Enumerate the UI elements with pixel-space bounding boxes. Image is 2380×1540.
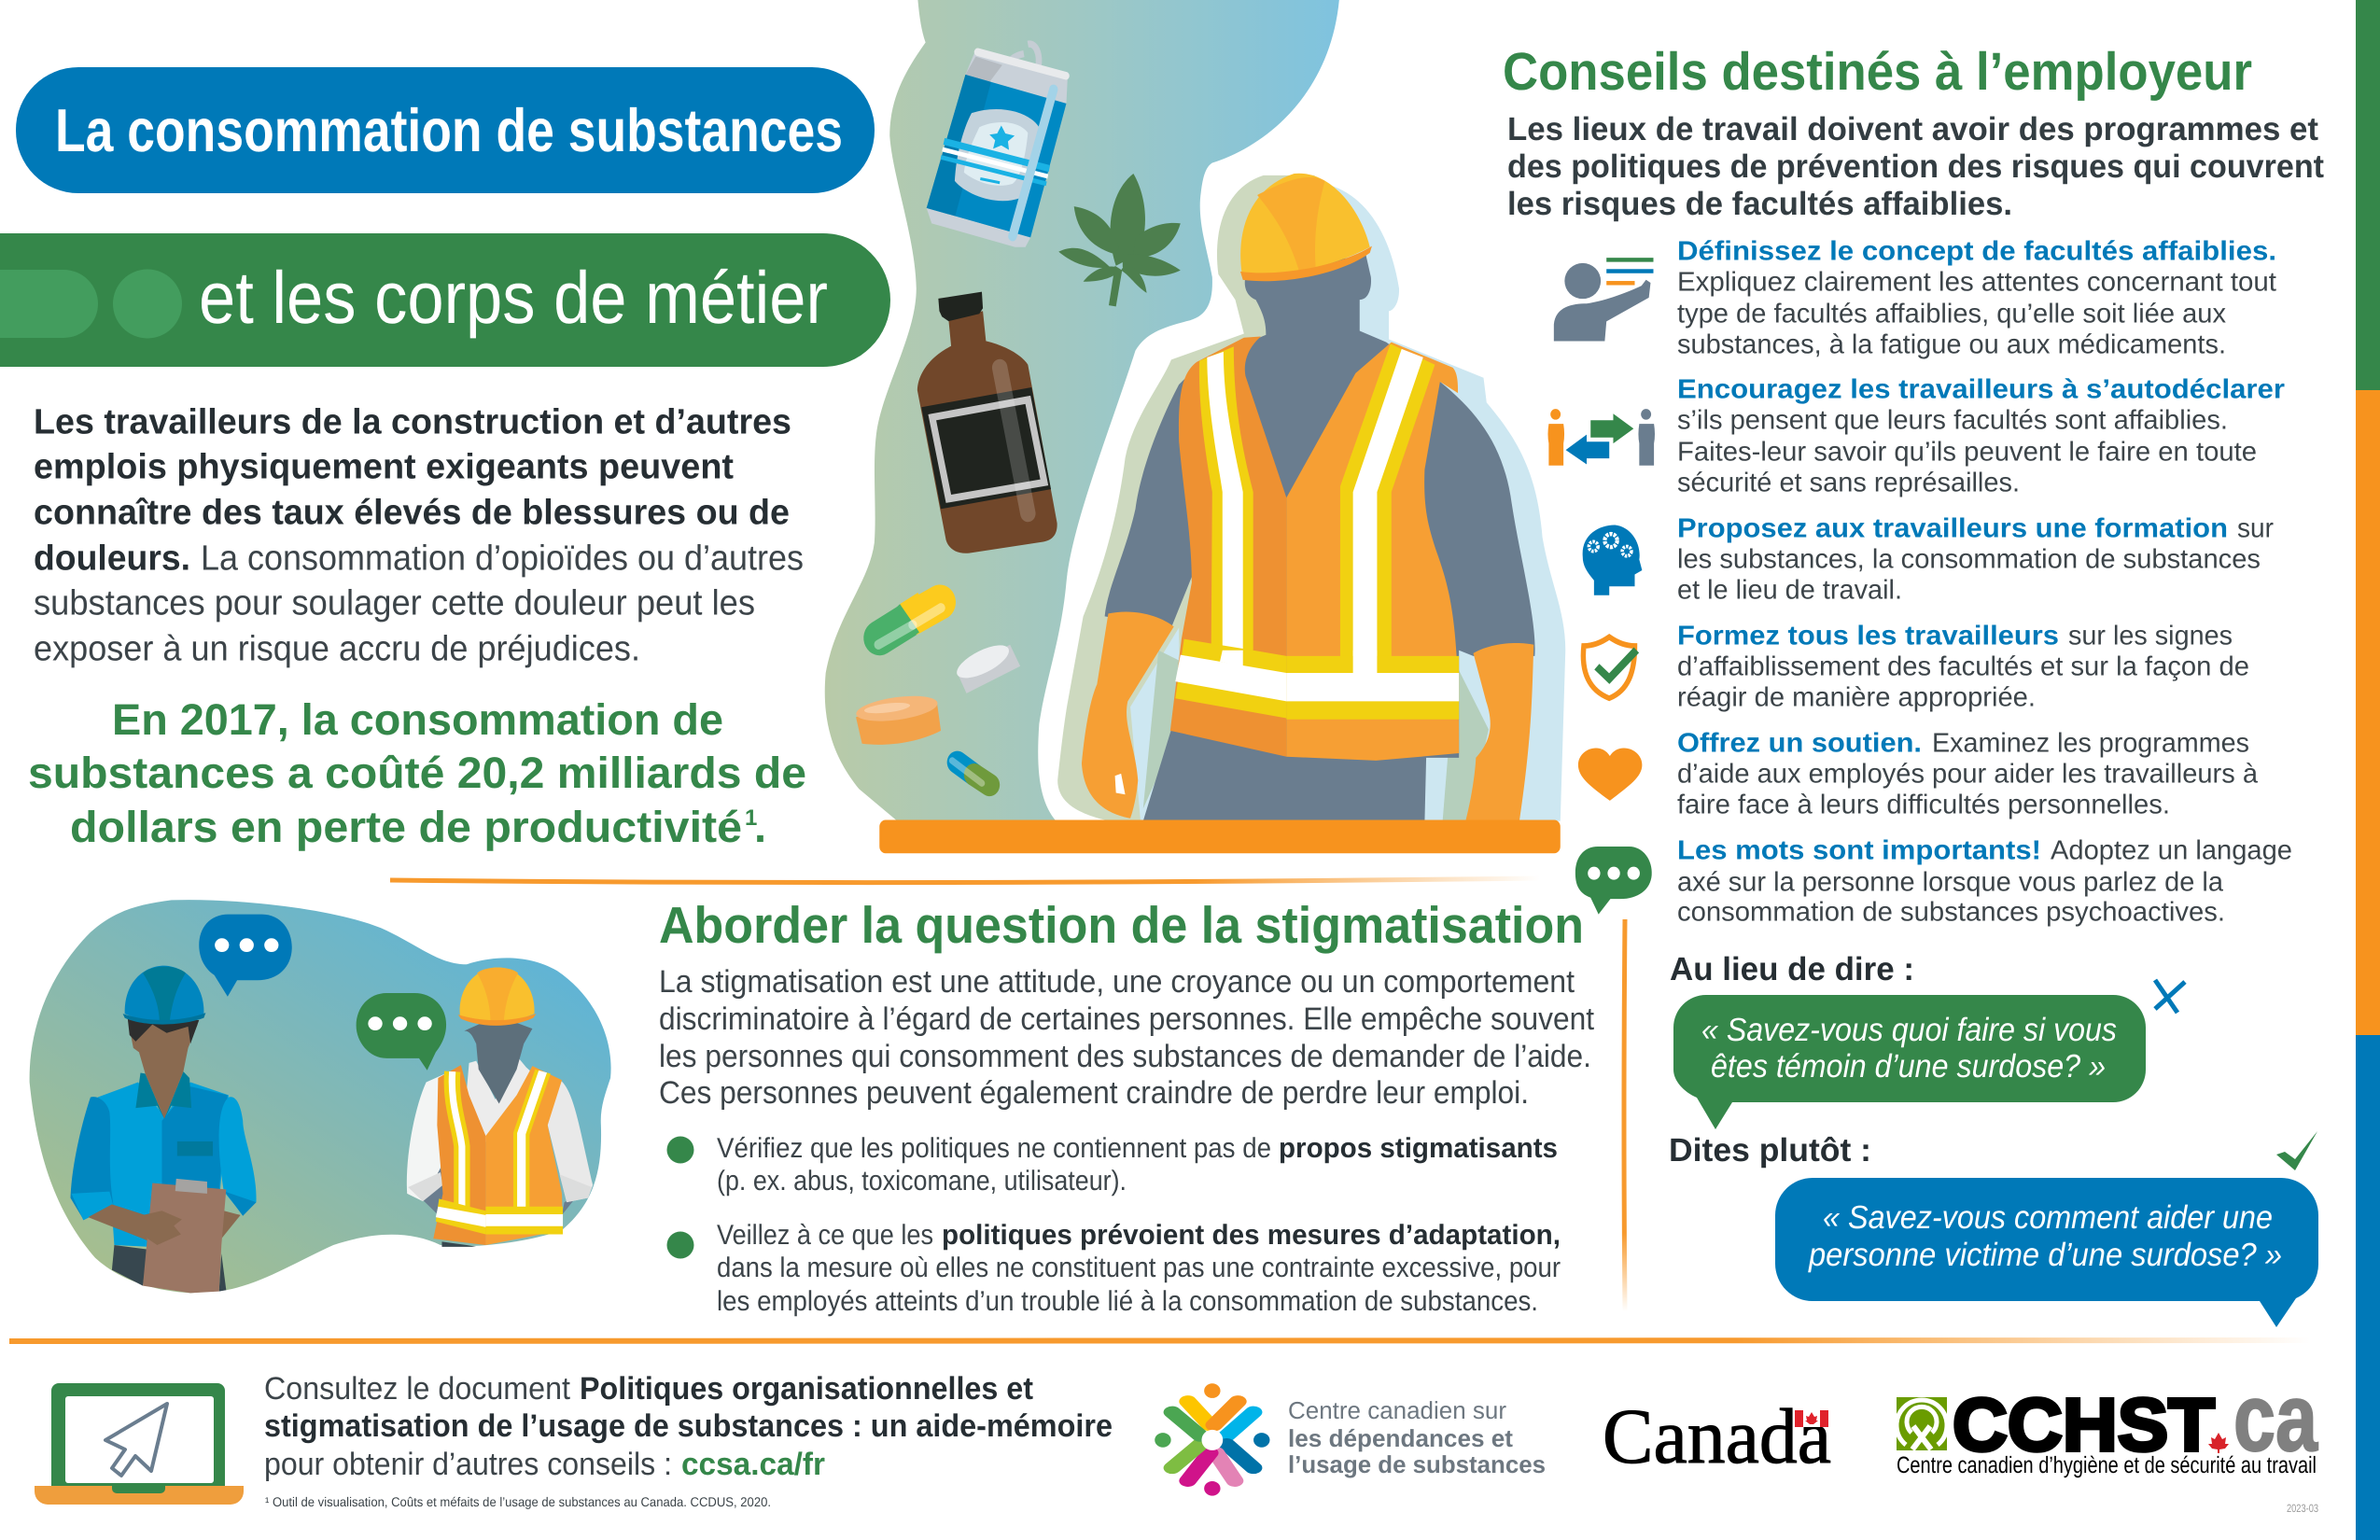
panel: stigma heading: Aborder la question de la stigmatisation [659, 896, 1584, 954]
tip 3: Proposez aux travailleurs une formation [1677, 513, 2228, 543]
tip 2: Encouragez les travailleurs à s’autodéclarer [1677, 374, 2285, 404]
gloves [1082, 611, 1174, 819]
tip 6: Adoptez un langage [2051, 835, 2292, 865]
panel: employer advice heading: Conseils destinés à l’employeur [1503, 42, 2252, 102]
icon: green speech bubble [1575, 847, 1652, 915]
intro paragraph: substances pour soulager cette douleur peut les [34, 584, 755, 623]
safety vest [1170, 337, 1459, 761]
footer call to action: pour obtenir d’autres conseils : [264, 1447, 672, 1482]
icon: head with gears [1583, 525, 1642, 595]
icon: presenter [1554, 258, 1653, 341]
intro paragraph: exposer à un risque accru de préjudices. [34, 629, 640, 668]
bubble: blue quote [1775, 1178, 2318, 1327]
icon: pill bottle [917, 292, 1057, 553]
stigma paragraph: Ces personnes peuvent également craindre de perdre leur emploi. [659, 1075, 1529, 1111]
bubble: blue quote: personne victime d’une surdose? » [1808, 1237, 2282, 1273]
icon: green check [2276, 1131, 2317, 1170]
title: blue pill: La consommation de substances [55, 96, 843, 164]
stigma paragraph [659, 964, 1595, 1111]
illustration: two workers talking [30, 900, 611, 1293]
footer call to action: Politiques organisationnelles et [580, 1371, 1033, 1407]
stigma paragraph: discriminatoire à l’égard de certaines personnes. Elle empêche souvent [659, 1001, 1595, 1037]
employer advice intro: les risques de facultés affaiblies. [1507, 186, 2012, 222]
icon: heart [1578, 748, 1642, 801]
panel: employer advice list [1677, 236, 2292, 927]
intro paragraph: Les travailleurs de la construction et d’autres [34, 403, 791, 442]
statistic callout: substances a coûté 20,2 milliards de [28, 748, 806, 797]
tip 3: les substances, la consommation de substances [1677, 544, 2261, 574]
tip 4: Formez tous les travailleurs [1677, 621, 2059, 651]
stigma bullet 1: Vérifiez que les politiques ne contiennent pas de [717, 1133, 1271, 1164]
icons: employer advice list [1547, 258, 1655, 915]
footnote: ¹ Outil de visualisation, Coûts et méfaits de l’usage de substances au Canada. CCDUS, 2020. [265, 1494, 771, 1509]
stigma paragraph: La stigmatisation est une attitude, une croyance ou un comportement [659, 964, 1575, 1000]
intro paragraph: emplois physiquement exigeants peuvent [34, 448, 734, 487]
tip 4: sur les signes [2068, 621, 2233, 651]
statistic callout: 1 [745, 805, 757, 831]
stigma bullet 2: les employés atteints d’un trouble lié à la consommation de substances. [717, 1286, 1538, 1317]
blob [30, 900, 611, 1293]
employer advice intro: Les lieux de travail doivent avoir des programmes et [1507, 111, 2318, 147]
icon: blue cross [2155, 980, 2185, 1013]
logo: CCHST: ca [2233, 1365, 2318, 1471]
side colour band [2356, 0, 2380, 1540]
date code: 2023-03 [2287, 1502, 2318, 1515]
label: dites plutot: Dites plutôt : [1669, 1132, 1871, 1169]
logo: CCHST [1897, 1365, 2318, 1478]
stigma bullet 2: politiques prévoient des mesures d’adaptation, [942, 1220, 1561, 1251]
intro paragraph [34, 403, 804, 668]
logo: CCSA: Centre canadien sur [1288, 1396, 1506, 1424]
statistic callout: dollars en perte de productivité [70, 802, 742, 851]
bubble: green quote: « Savez-vous quoi faire si vous [1701, 1012, 2117, 1048]
icon: laptop with cursor [35, 1383, 244, 1505]
gradient blob [825, 0, 1339, 821]
tip 4 [1677, 621, 2249, 712]
tip 1: substances, à la fatigue ou aux médicaments. [1677, 329, 2226, 359]
bubble: blue [199, 915, 292, 997]
icon: cannabis leaf [1058, 174, 1181, 306]
icon: white tablet [953, 638, 1020, 693]
tip 2: s’ils pensent que leurs facultés sont affaiblies. [1677, 405, 2228, 435]
tip 1: type de facultés affaiblies, qu’elle soit liée aux [1677, 299, 2226, 329]
tip 5: Offrez un soutien. [1677, 728, 1922, 758]
main illustration: worker and substances [825, 0, 1565, 853]
stigma bullet 1: (p. ex. abus, toxicomane, utilisateur). [717, 1166, 1127, 1197]
bubble: green [357, 993, 446, 1071]
tip 5: faire face à leurs difficultés personnelles. [1677, 790, 2170, 819]
tip 4: réagir de manière appropriée. [1677, 682, 2036, 712]
worker body [1082, 174, 1535, 821]
footer call to action: ccsa.ca/fr [681, 1447, 825, 1482]
logo: Canada wordmark: Canada [1603, 1393, 1831, 1480]
intro paragraph: connaître des taux élevés de blessures ou de [34, 493, 790, 532]
bubble: green quote: êtes témoin d’une surdose? » [1711, 1048, 2106, 1085]
pale green worker halo [1057, 175, 1314, 821]
worker in blue [71, 966, 257, 1293]
stigma bullet 1 [666, 1133, 1558, 1197]
tip 1: Définissez le concept de facultés affaiblies. [1677, 236, 2276, 266]
tip 2: sécurité et sans représailles. [1677, 468, 2020, 497]
icon: shield check [1583, 637, 1636, 698]
tip 5: d’aide aux employés pour aider les travailleurs à [1677, 759, 2259, 789]
icon: exchange arrows [1547, 409, 1655, 466]
tip 3 [1677, 513, 2274, 605]
hard hat [1240, 174, 1370, 274]
tip 3: sur [2237, 513, 2274, 543]
statistic callout [28, 694, 806, 851]
tip 5: Examinez les programmes [1932, 728, 2249, 758]
tip 4: d’affaiblissement des facultés et sur la façon de [1677, 651, 2249, 681]
employer advice intro: des politiques de prévention des risques qui couvrent [1507, 148, 2324, 185]
statistic callout: En 2017, la consommation de [112, 694, 723, 744]
stigma bullet 2: dans la mesure où elles ne constituent pas une contrainte excessive, pour [717, 1253, 1561, 1283]
employer advice intro [1507, 111, 2324, 222]
tip 2 [1677, 374, 2285, 497]
title: green pill: et les corps de métier [199, 256, 828, 339]
panel: say instead [1669, 951, 2318, 1327]
tip 6: axé sur la personne lorsque vous parlez de la [1677, 867, 2224, 897]
logo: CCHST: CCHST [1953, 1383, 2215, 1466]
pale blue worker halo [1314, 184, 1565, 821]
tip 6: Les mots sont importants! [1677, 835, 2041, 865]
tip 5 [1677, 728, 2259, 819]
tip 1 [1677, 236, 2276, 359]
icon: orange tablet [855, 692, 941, 745]
stigma bullet 2 [666, 1220, 1561, 1317]
logo: CCSA: l’usage de substances [1288, 1450, 1546, 1478]
logo: CCSA [1155, 1383, 1546, 1496]
orange base bar [879, 820, 1561, 853]
divider strokes [390, 878, 1540, 883]
clipboard [143, 1183, 226, 1293]
bubble: blue quote: « Savez-vous comment aider une [1823, 1199, 2273, 1236]
footer call to action: stigmatisation de l’usage de substances : un aide-mémoire [264, 1408, 1113, 1444]
bubble: green quote [1673, 995, 2146, 1129]
label: au lieu de dire: Au lieu de dire : [1670, 951, 1914, 987]
intro paragraph: douleurs. [34, 539, 190, 579]
title: green pill [0, 233, 890, 367]
icon: capsule green yellow [878, 593, 941, 645]
logo: CCSA: les dépendances et [1288, 1424, 1513, 1452]
tip 6 [1677, 835, 2292, 927]
tip 2: Faites-leur savoir qu’ils peuvent le faire en toute [1677, 437, 2257, 467]
stigma bullet 1: propos stigmatisants [1279, 1133, 1558, 1164]
statistic callout: . [754, 802, 766, 851]
tip 3: et le lieu de travail. [1677, 575, 1902, 605]
stigma paragraph: les personnes qui consomment des substances de demander de l’aide. [659, 1039, 1591, 1074]
stigma bullet 2: Veillez à ce que les [717, 1220, 933, 1251]
title: blue pill [16, 67, 875, 193]
icon: capsule blue green [952, 761, 989, 785]
tip 1: Expliquez clairement les attentes concernant tout [1677, 267, 2276, 297]
footer call to action [264, 1371, 1113, 1482]
worker with vest [407, 968, 593, 1247]
intro paragraph: La consommation d’opioïdes ou d’autres [201, 539, 804, 579]
icon: beer can [927, 44, 1068, 247]
footer call to action: Consultez le document [264, 1371, 571, 1407]
tip 6: consommation de substances psychoactives. [1677, 897, 2225, 927]
